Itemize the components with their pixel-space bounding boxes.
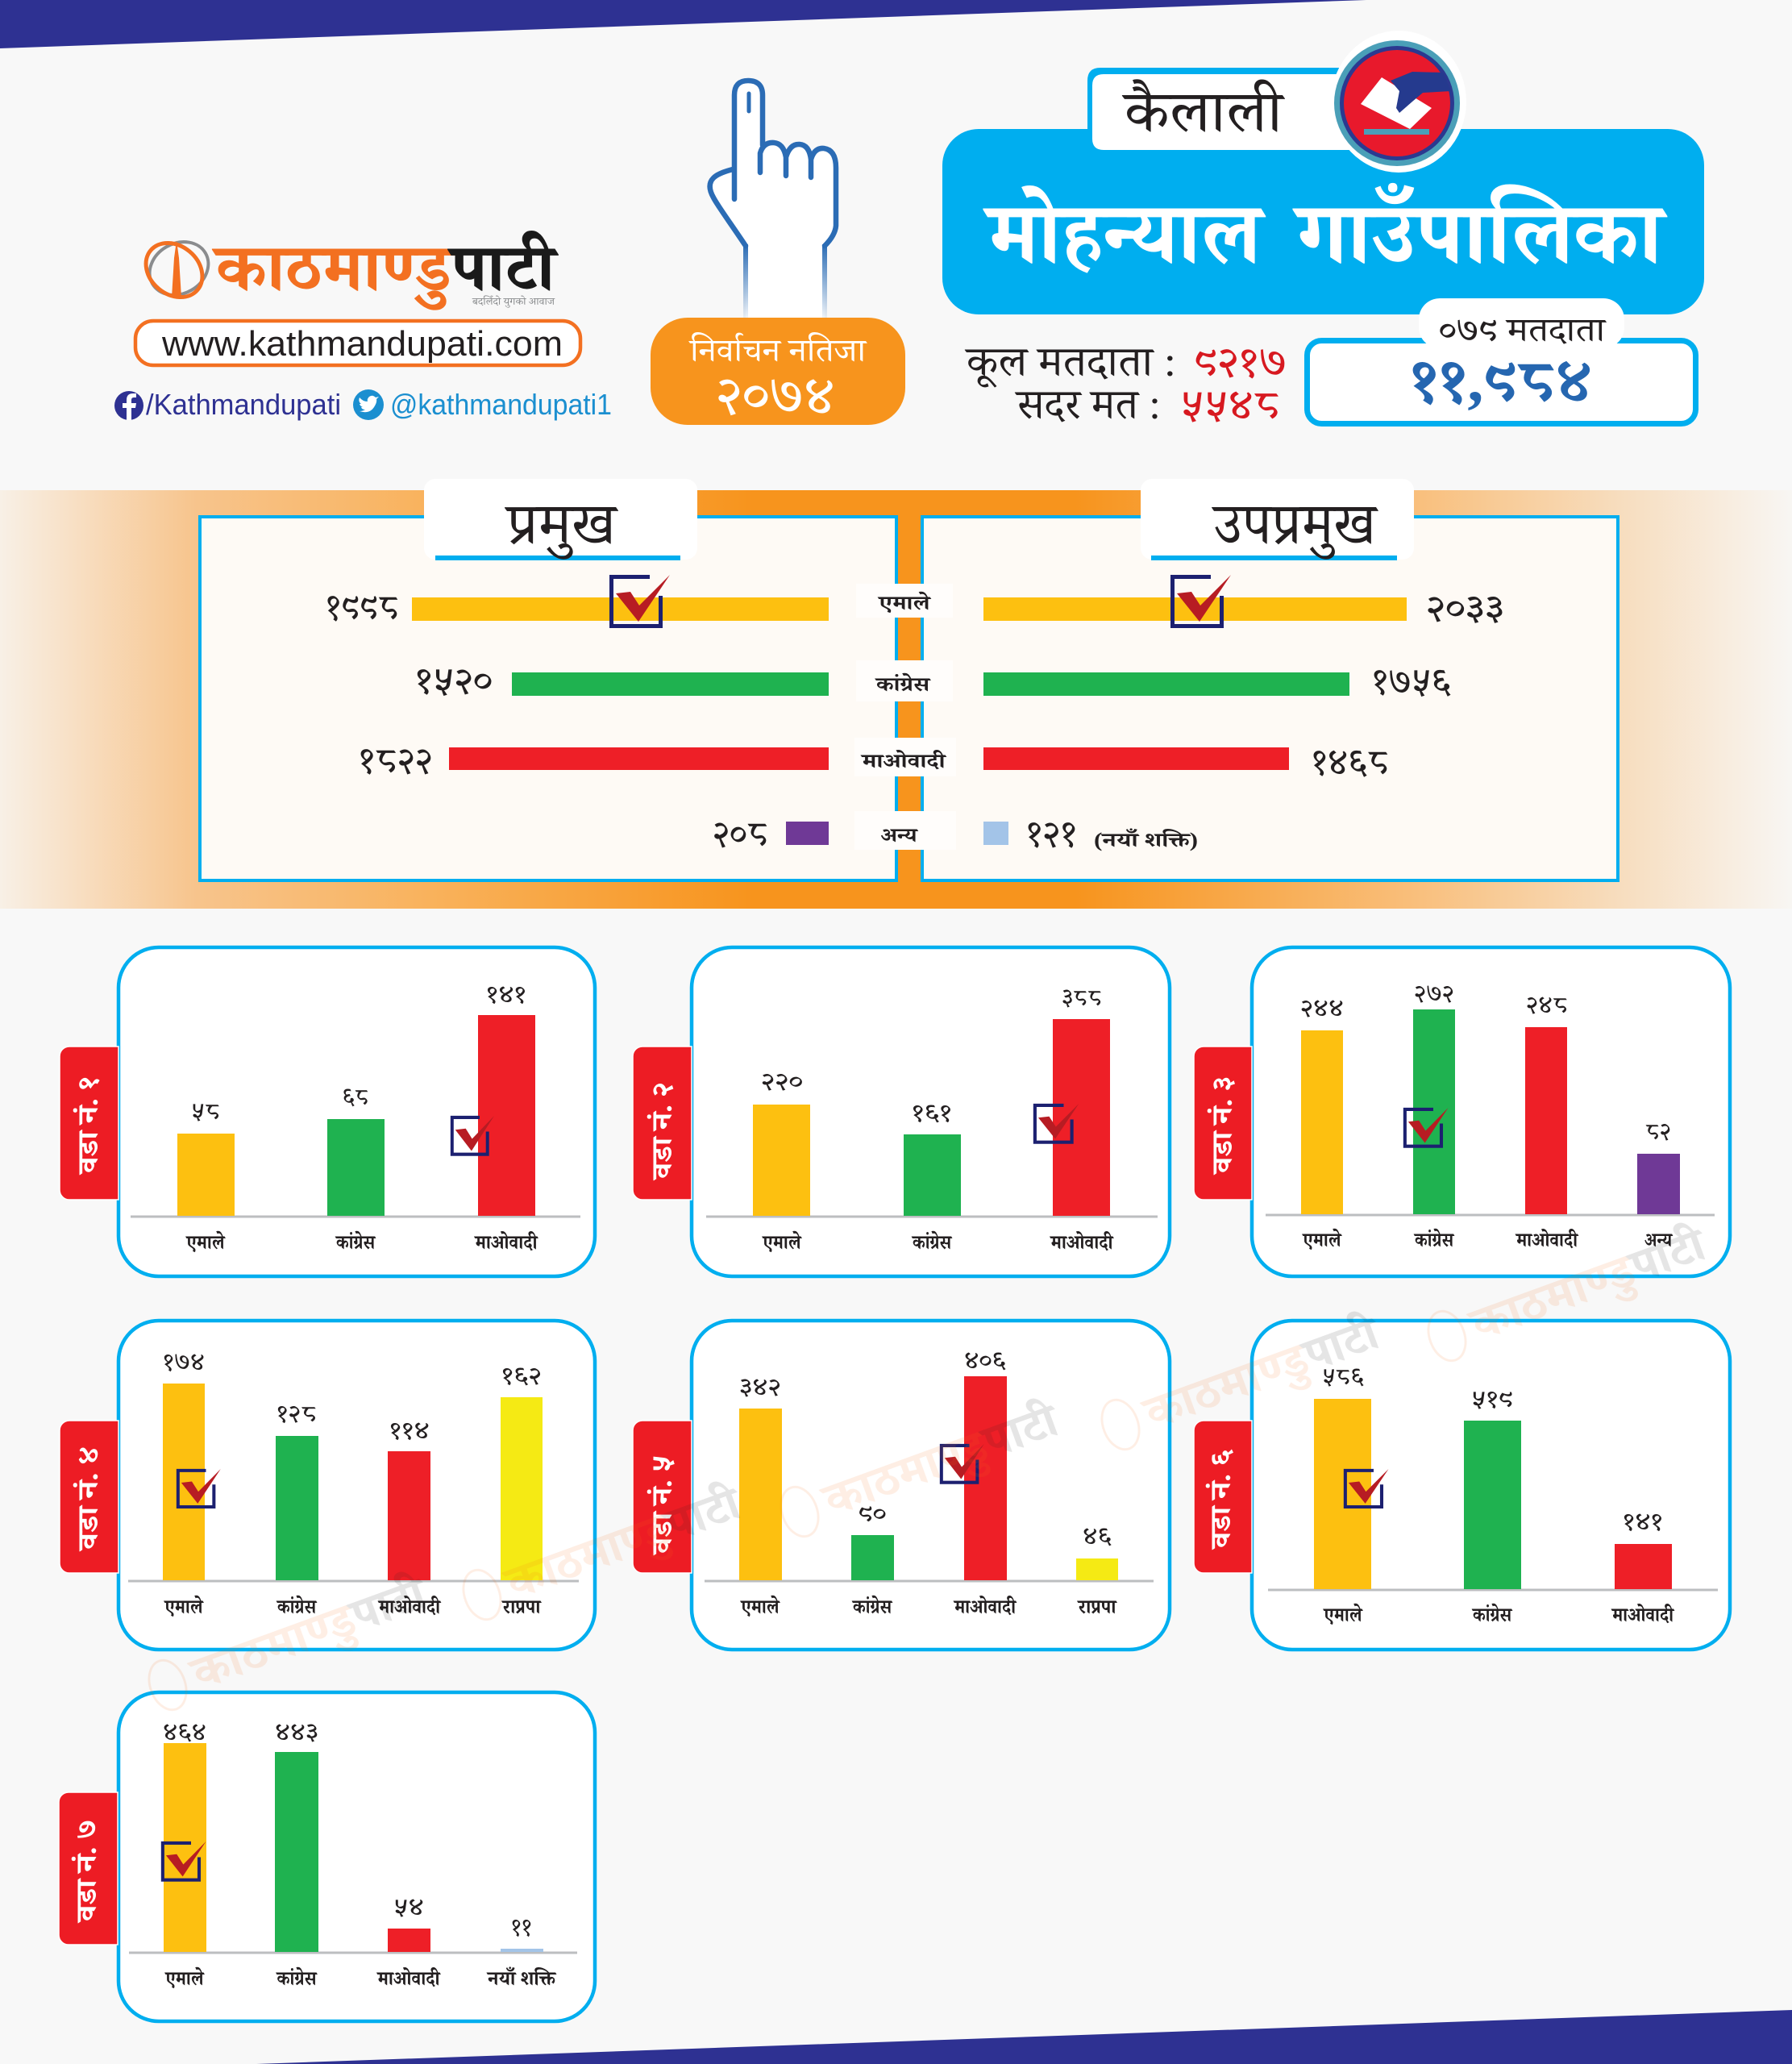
bar: Congress 519	[1464, 1386, 1521, 1626]
bar: Congress 90: ९०	[858, 1500, 887, 1527]
bar: Maoist 1468: १४६८	[1312, 741, 1389, 782]
watermark: Kathmandupati logos: काठमाण्डु	[814, 1417, 1000, 1531]
bar: RPP 162	[501, 1363, 543, 1618]
icon: voting hand	[710, 81, 836, 318]
bar: UML 2033: २०३३	[1426, 587, 1504, 628]
bar: Maoist 1468	[983, 741, 1389, 782]
label: Maoist: माओवादी	[860, 749, 947, 772]
check mark: winner	[178, 1469, 221, 1507]
ward tag: वडा नं. ५	[646, 1455, 678, 1556]
bar: UML 342: ३४२	[739, 1374, 781, 1400]
district tab: Kailali: कैलाली	[1122, 78, 1286, 144]
bar: Maoist 54: माओवादी	[376, 1966, 442, 1990]
bar: UML 58: एमाले	[185, 1230, 226, 1254]
bar: Congress 161: १६१	[912, 1100, 952, 1126]
bar: Maoist 248: २४८	[1526, 992, 1568, 1018]
bar: new force 121: (नयाँ शक्ति)	[1094, 827, 1198, 851]
bar: Congress 519: ५१९	[1471, 1386, 1513, 1413]
bar: Congress 161	[904, 1100, 961, 1254]
bar: Congress 519: कांग्रेस	[1471, 1602, 1513, 1626]
bar: Maoist 248	[1515, 992, 1579, 1251]
bar: UML 464: ४६४	[163, 1719, 206, 1746]
top colour band	[0, 0, 1366, 48]
check mark: winner	[452, 1116, 494, 1155]
bar: Congress 1756	[983, 660, 1451, 701]
logo wordmark: काठमाण्डु	[212, 231, 455, 310]
bar: Congress 68	[327, 1084, 385, 1254]
ward tag: वडा नं. ३	[1206, 1076, 1238, 1176]
district tab: Kailali	[1087, 68, 1370, 153]
social links	[114, 388, 612, 421]
municipality name	[983, 182, 1668, 282]
bar: Congress 1756: १७५६	[1372, 660, 1451, 701]
ward tag: वडा नं. ४	[72, 1446, 104, 1552]
heading: deputy mayor	[1141, 479, 1414, 560]
bar: UML 1998: १९९८	[326, 586, 399, 627]
facebook handle: /Kathmandupati	[146, 388, 341, 421]
watermark: Kathmandupati logos: पाटी	[973, 1392, 1067, 1470]
check mark: winner	[1035, 1104, 1079, 1142]
bar: Maoist 141	[1611, 1508, 1675, 1626]
ward tag	[59, 1792, 118, 1945]
bar: Maoist 406: ४०६	[964, 1347, 1006, 1374]
badge: election result 2074: निर्वाचन नतिजा	[688, 332, 867, 368]
panel: ward 5	[633, 1321, 1170, 1650]
panel: ward 2	[633, 947, 1170, 1276]
logo wordmark: बदलिँदो युगको आवाज	[472, 295, 555, 308]
bar: UML 220: २२०	[761, 1068, 803, 1095]
check mark: winner	[1172, 575, 1231, 626]
bar: UML 58	[177, 1098, 235, 1254]
bar: other 208	[713, 813, 829, 854]
bar: Maoist 1822: १८२२	[359, 739, 433, 780]
stat: total and valid votes: कूल मतदाता :	[964, 339, 1176, 388]
bar: Maoist 388	[1050, 984, 1115, 1254]
bar: UML 174: एमाले	[164, 1594, 204, 1618]
ward tag: वडा नं. २	[646, 1082, 678, 1181]
bar: RPP 46	[1076, 1523, 1118, 1618]
bar: UML 586: ५८६	[1322, 1363, 1364, 1390]
twitter handle: @kathmandupati1	[390, 388, 612, 421]
bar: UML 220	[753, 1068, 810, 1254]
bar: UML 342	[739, 1374, 782, 1618]
bottom colour band	[256, 2010, 1792, 2064]
check mark: winner	[942, 1444, 984, 1483]
bar: Congress 161: कांग्रेस	[911, 1230, 953, 1254]
bar: Maoist 54	[376, 1894, 442, 1990]
ward tag	[633, 1047, 692, 1200]
heading: mayor: प्रमुख	[505, 492, 619, 560]
bar: UML 244: एमाले	[1302, 1227, 1342, 1251]
watermark: Kathmandupati logos: काठमाण्डु	[497, 1500, 682, 1614]
municipality name: गाउँपालिका	[1292, 182, 1668, 282]
bar: Maoist 141: १४१	[486, 981, 526, 1008]
bar: UML 464: एमाले	[164, 1966, 205, 1990]
bar: RPP 46: ४६	[1083, 1523, 1112, 1550]
badge: election result 2074: २०७४	[716, 366, 835, 425]
bar: RPP 46: राप्रपा	[1077, 1596, 1118, 1618]
bar: Maoist 1822	[359, 739, 829, 780]
check mark: winner	[1405, 1108, 1448, 1146]
check mark: winner	[163, 1841, 206, 1880]
ward tag: वडा नं. १	[72, 1076, 104, 1176]
website link box: www.kathmandupati.com	[161, 324, 563, 364]
bar: Maoist 114: माओवादी	[377, 1595, 442, 1618]
watermark: Kathmandupati logos: काठमाण्डु	[1135, 1330, 1320, 1444]
bar: RPP 162: १६२	[501, 1363, 542, 1389]
bar: Congress 128: १२८	[276, 1400, 317, 1427]
check mark: winner	[1345, 1469, 1388, 1507]
label: Congress: कांग्रेस	[875, 672, 931, 696]
bar: UML 342: एमाले	[740, 1594, 780, 1618]
ward tag: वडा नं. ६	[1204, 1449, 1237, 1550]
bar: UML 244	[1300, 995, 1344, 1251]
bar: new force 121	[983, 813, 1198, 854]
stat box: 2079 voters: ११,९८४	[1410, 347, 1592, 414]
bar: Congress 443	[275, 1719, 318, 1990]
bar: Congress 1520: १५२०	[415, 660, 493, 701]
watermark: Kathmandupati logos: पाटी	[1294, 1305, 1388, 1383]
stat box: 2079 voters	[1308, 298, 1696, 424]
bar: UML 220: एमाले	[762, 1230, 802, 1254]
bar: Maoist 248: माओवादी	[1515, 1228, 1579, 1251]
bar: new force 11: नयाँ शक्ति	[486, 1966, 557, 1990]
bar: RPP 162: राप्रपा	[501, 1596, 543, 1618]
ward tag	[1194, 1421, 1252, 1573]
stat: total and valid votes: ९२१७	[1194, 339, 1287, 385]
bar: Maoist 141	[474, 981, 539, 1254]
bar: UML 244: २४४	[1300, 995, 1344, 1022]
bar: Congress 272: २७२	[1414, 980, 1454, 1007]
bar: Maoist 114: ११४	[389, 1417, 430, 1444]
panel: ward 1	[60, 947, 595, 1276]
bar: Congress 272	[1413, 980, 1455, 1251]
bar: Congress 272: कांग्रेस	[1413, 1227, 1455, 1251]
stat: total and valid votes	[964, 339, 1287, 428]
logo wordmark	[212, 231, 559, 310]
logo wordmark: पाटी	[447, 231, 559, 305]
watermark: Kathmandupati logos	[142, 1216, 1716, 1719]
watermark: Kathmandupati logos: पाटी	[1620, 1216, 1715, 1294]
panel: ward 3	[1194, 947, 1730, 1276]
bar: UML 464	[163, 1719, 206, 1990]
label: other	[854, 811, 956, 850]
icon: election ballot emblem	[1331, 31, 1466, 173]
logo: Kathmandupati	[135, 231, 559, 310]
bar: UML 2033	[983, 587, 1504, 628]
bar: other 82	[1637, 1118, 1680, 1251]
stat: total and valid votes: सदर मत :	[1014, 382, 1161, 428]
bar: UML 174: १७४	[163, 1349, 205, 1375]
bar: other 208: २०८	[713, 813, 768, 854]
bar: Maoist 388: माओवादी	[1050, 1230, 1115, 1254]
icon: twitter	[353, 389, 384, 420]
label: UML	[856, 584, 953, 618]
ward tag	[633, 1421, 692, 1573]
bar: UML 586: एमाले	[1323, 1602, 1363, 1626]
heading: deputy mayor: उपप्रमुख	[1212, 492, 1379, 560]
label: other: अन्य	[880, 825, 919, 847]
ward tag	[60, 1421, 118, 1573]
bar: Maoist 54: ५४	[393, 1894, 424, 1920]
bar: UML 174	[163, 1349, 205, 1618]
panel: mayor results	[200, 479, 896, 880]
watermark: Kathmandupati logos: काठमाण्डु	[182, 1591, 368, 1704]
icon: facebook	[114, 391, 143, 420]
panel: ward 6	[1194, 1321, 1730, 1650]
municipality name: मोहन्याल	[983, 184, 1266, 282]
icon: globe and tower	[135, 231, 218, 308]
centre party labels	[854, 584, 956, 850]
bar: Maoist 114	[377, 1417, 442, 1618]
bar: UML 58: ५८	[191, 1098, 220, 1125]
ward tag	[60, 1047, 118, 1200]
ward tag	[1194, 1047, 1252, 1200]
bar: Congress 90	[851, 1500, 894, 1618]
watermark: Kathmandupati logos: पाटी	[655, 1475, 750, 1553]
check mark: winner	[611, 575, 670, 626]
bar: Congress 1520	[415, 660, 829, 701]
badge: election result 2074	[651, 318, 905, 425]
bar: other 82: अन्य	[1644, 1230, 1674, 1251]
bar: Maoist 406: माओवादी	[953, 1595, 1017, 1618]
bar: Congress 128	[276, 1400, 318, 1618]
watermark: Kathmandupati logos: पाटी	[341, 1565, 435, 1643]
ward tag: वडा नं. ७	[70, 1820, 102, 1924]
bar: Congress 443: कांग्रेस	[276, 1966, 318, 1990]
stat: total and valid votes: ५५४८	[1180, 382, 1280, 428]
heading: mayor	[424, 479, 697, 560]
bar: new force 121: १२१	[1026, 813, 1077, 854]
bar: UML 1998	[326, 586, 829, 627]
bar: Maoist 406	[953, 1347, 1017, 1618]
bar: Maoist 141: १४१	[1623, 1508, 1663, 1535]
stat box: 2079 voters: ०७९ मतदाता	[1439, 312, 1607, 349]
bar: other 82: ८२	[1645, 1118, 1671, 1145]
bar: UML 586	[1314, 1363, 1371, 1626]
bar: Maoist 388: ३८८	[1062, 984, 1102, 1011]
bar: Congress 90: कांग्रेस	[851, 1594, 893, 1618]
bar: Maoist 141: माओवादी	[474, 1230, 539, 1254]
bar: Congress 68: कांग्रेस	[335, 1230, 376, 1254]
panel: municipality title	[942, 129, 1704, 314]
bar: Congress 68: ६८	[342, 1084, 369, 1110]
panel: ward 4	[60, 1321, 595, 1650]
bar: new force 11	[486, 1914, 557, 1990]
panel: ward 7	[59, 1692, 595, 2021]
bar: Maoist 141: माओवादी	[1611, 1603, 1675, 1626]
orange results band	[0, 490, 1792, 909]
bar: Congress 128: कांग्रेस	[276, 1594, 318, 1618]
panel: deputy mayor results	[922, 479, 1618, 880]
bar: Congress 443: ४४३	[275, 1719, 318, 1746]
label: Congress	[856, 660, 953, 701]
bar: new force 11: ११	[511, 1914, 532, 1941]
label: Maoist	[854, 738, 956, 776]
label: UML: एमाले	[877, 590, 932, 614]
watermark: Kathmandupati logos: काठमाण्डु	[1461, 1242, 1647, 1355]
